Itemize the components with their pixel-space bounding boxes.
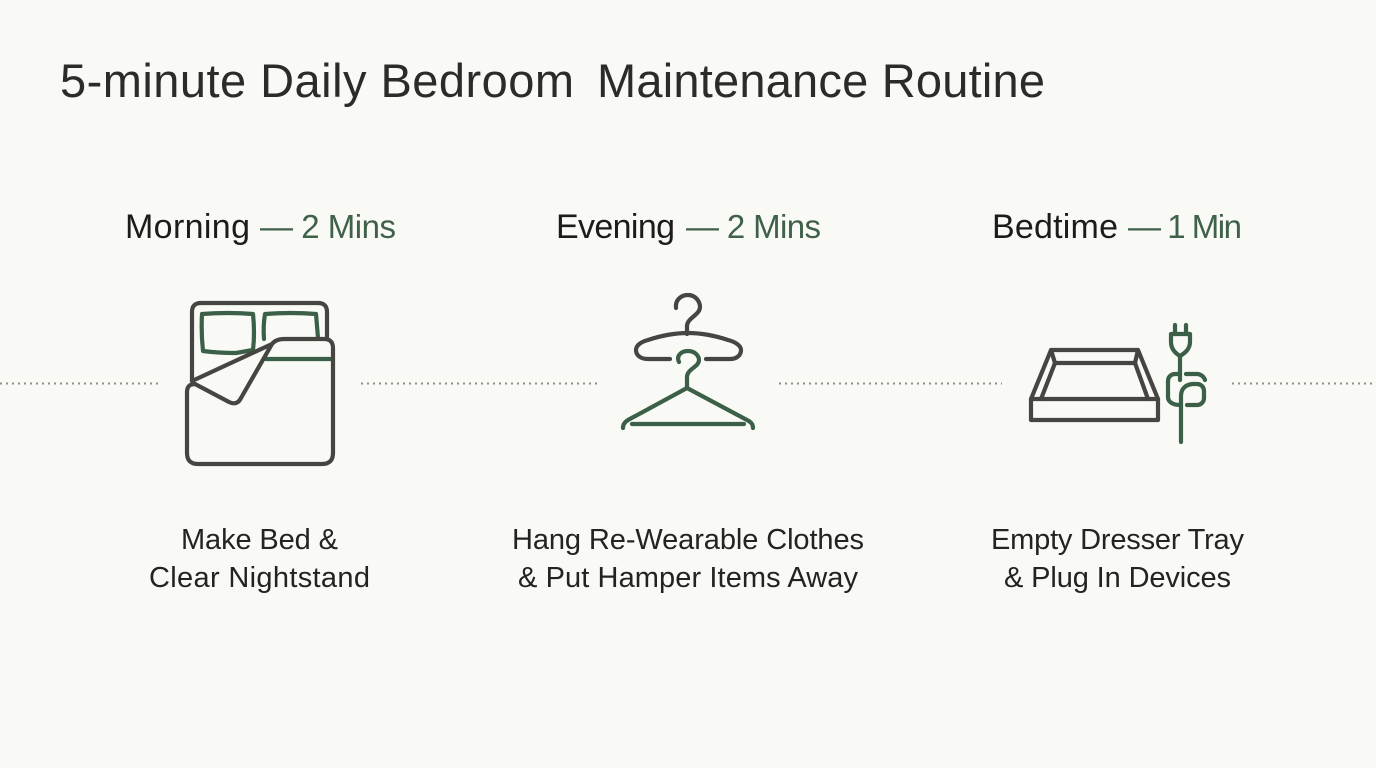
heading: evening 2 mins: — 2 Mins xyxy=(686,208,821,245)
text: evening task xyxy=(512,524,864,594)
title xyxy=(60,54,1045,107)
text: morning task: Make Bed & xyxy=(181,524,338,556)
icon: dresser tray xyxy=(1031,350,1158,420)
text: evening task: & Put Hamper Items Away xyxy=(518,562,858,594)
heading: morning 2 mins: — 2 Mins xyxy=(260,208,396,245)
heading: bedtime 1 min: — 1 Min xyxy=(1128,208,1242,245)
icon: bed with folded duvet xyxy=(187,303,333,464)
heading: morning 2 mins: Morning xyxy=(125,208,250,246)
heading: bedtime 1 min xyxy=(992,208,1242,246)
icon: plug and cord xyxy=(1168,325,1205,442)
heading: evening 2 mins: Evening xyxy=(556,208,675,246)
text: evening task: Hang Re-Wearable Clothes xyxy=(512,524,864,556)
text: bedtime task: Empty Dresser Tray xyxy=(991,524,1244,556)
icon: two hangers xyxy=(623,295,753,428)
text: morning task xyxy=(149,524,370,594)
title: Maintenance Routine xyxy=(597,54,1045,107)
text: morning task: Clear Nightstand xyxy=(149,562,370,594)
text: bedtime task xyxy=(991,524,1244,594)
heading: evening 2 mins xyxy=(556,208,821,246)
panel: bedtime xyxy=(991,208,1244,594)
text: bedtime task: & Plug In Devices xyxy=(1004,562,1231,594)
heading: morning 2 mins xyxy=(125,208,396,246)
heading: bedtime 1 min: Bedtime xyxy=(992,208,1118,246)
panel: morning xyxy=(125,208,396,594)
title: 5-minute Daily Bedroom xyxy=(60,54,574,107)
panel: evening xyxy=(512,208,864,594)
